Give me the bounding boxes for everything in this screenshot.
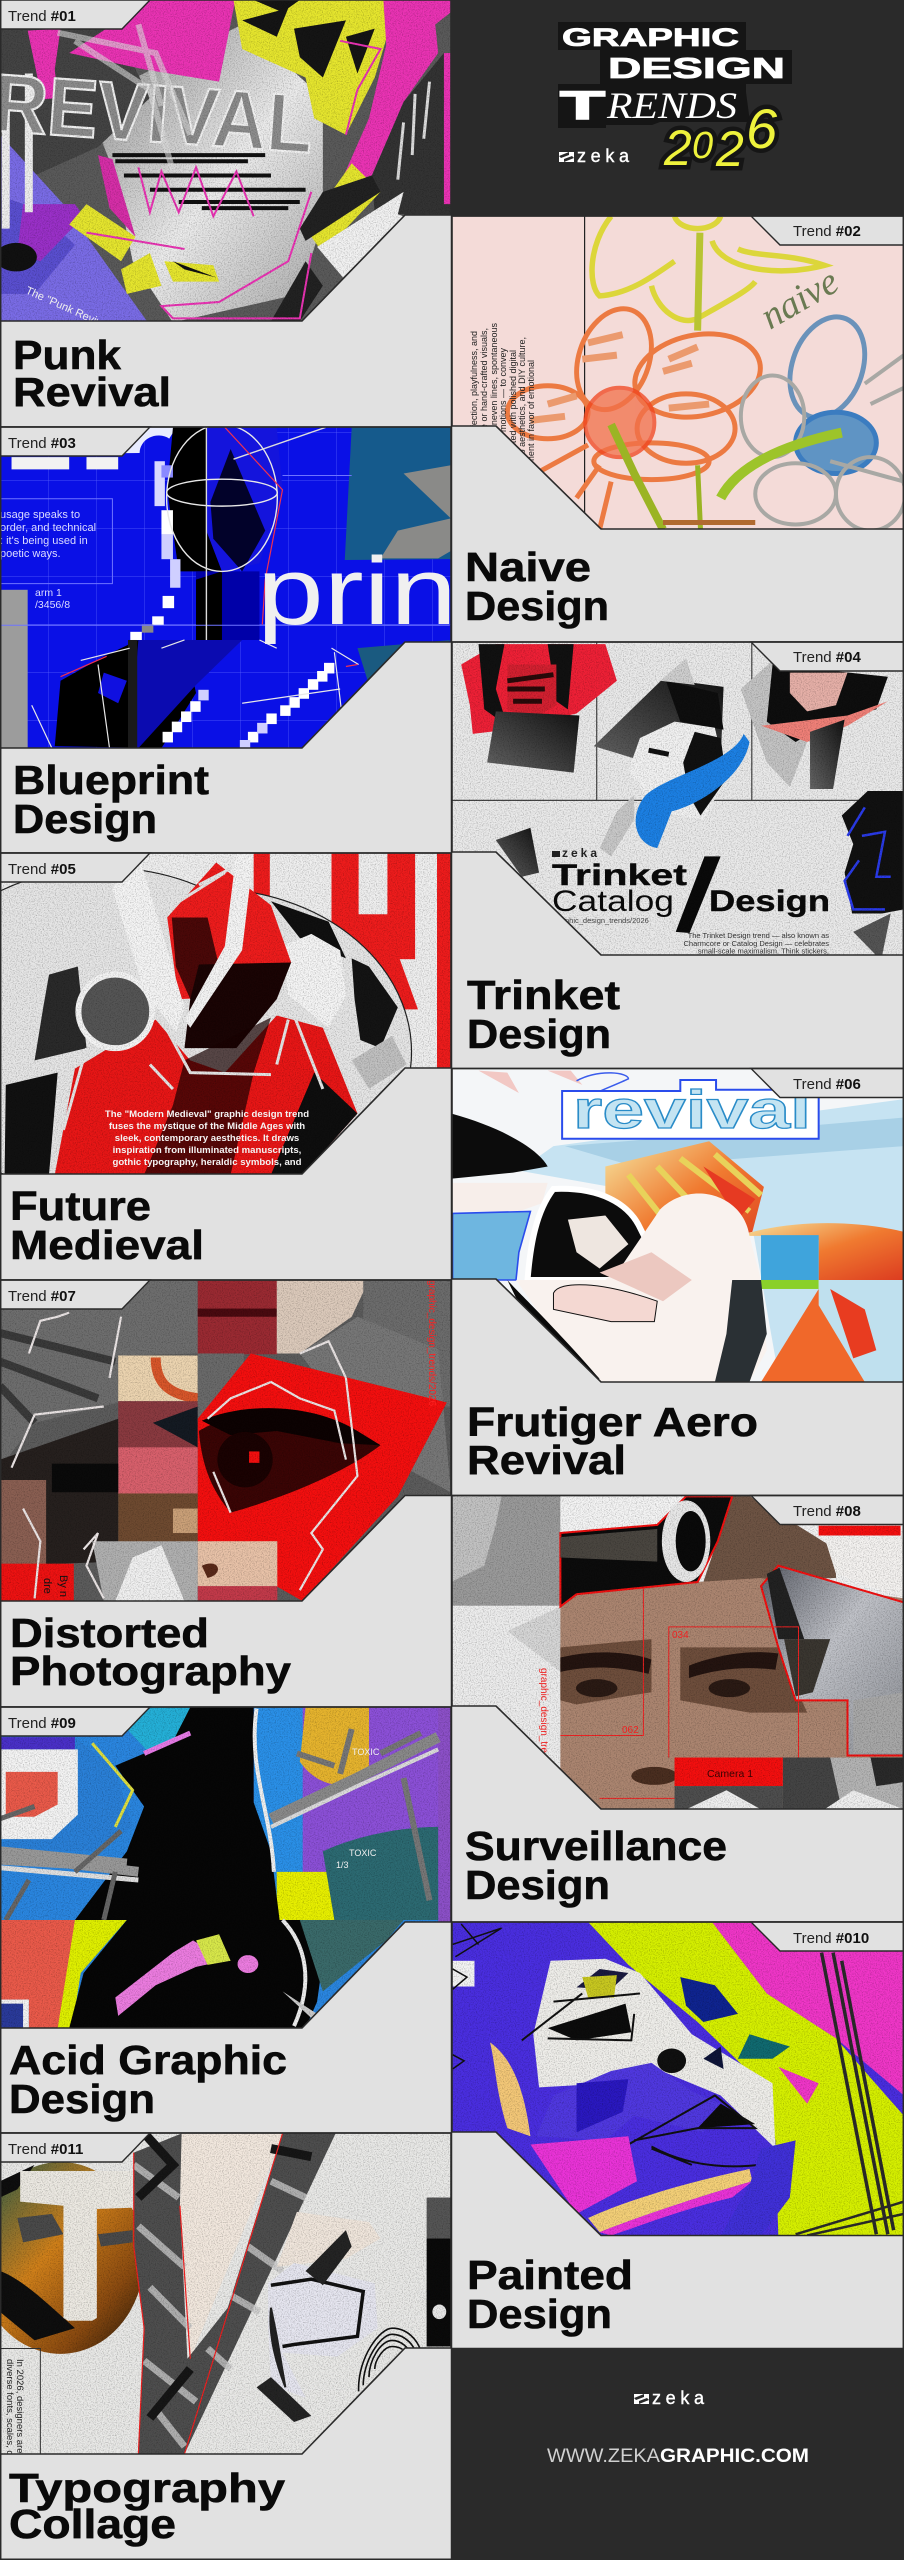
image outline xyxy=(452,1922,904,2236)
catalog body text xyxy=(684,932,829,954)
heading: blueprint design xyxy=(13,757,209,842)
artwork text: revival: REVIVAL xyxy=(0,58,316,171)
catalog heading xyxy=(552,859,830,918)
tab: trend 11: Trend #011 xyxy=(8,2141,83,2158)
body text: : it's being used in xyxy=(0,535,88,547)
tab: trend 07: Trend #07 xyxy=(8,1288,76,1305)
red box text xyxy=(44,1576,68,1596)
rotated body text: motions — to convey xyxy=(498,348,508,432)
box labels xyxy=(622,1630,689,1736)
tab: trend 03 xyxy=(0,427,150,456)
heading: acid graphic design: Design xyxy=(9,2076,155,2122)
heading: future medieval xyxy=(10,1183,204,1268)
big type: print: prin xyxy=(257,538,457,645)
tab: trend 02: Trend #02 xyxy=(793,223,861,240)
heading: future medieval: Future xyxy=(10,1183,151,1229)
panel: trend 02 naive design xyxy=(452,216,904,629)
image outline xyxy=(452,642,904,955)
heading: painted design xyxy=(467,2252,633,2337)
heading: acid graphic design: Acid Graphic xyxy=(9,2037,287,2083)
catalog heading: Trinket xyxy=(552,859,687,892)
tab: trend 06: Trend #06 xyxy=(793,1076,861,1093)
heading: distorted photography: Photography xyxy=(10,1648,291,1694)
website url xyxy=(547,2445,809,2467)
rotated body text: e or hand-crafted visuals, xyxy=(479,328,489,429)
artwork: punk collage xyxy=(0,0,452,334)
small label: /3456/8 xyxy=(35,599,70,611)
heading: naive design xyxy=(465,544,609,629)
footer panel xyxy=(452,2349,904,2560)
gothic text block xyxy=(105,1109,309,1168)
heading: typography collage xyxy=(9,2465,285,2547)
heading: trinket design: Trinket xyxy=(467,972,620,1018)
catalog heading: Catalog xyxy=(552,885,674,918)
image outline xyxy=(0,1707,451,2028)
box labels: 034 xyxy=(672,1630,689,1641)
image outline xyxy=(0,427,451,748)
panel: trend 01 punk revival xyxy=(0,0,452,415)
catalog body text: Charmcore or Catalog Design — celebrates xyxy=(684,939,829,948)
camera label: Camera 1 xyxy=(707,1768,753,1780)
heading: future medieval: Medieval xyxy=(10,1222,204,1268)
body text: usage speaks to xyxy=(0,509,80,521)
body text: order, and technical xyxy=(0,522,96,534)
gothic text block: fuses the mystique of the Middle Ages with xyxy=(109,1121,305,1132)
heading: typography collage: Collage xyxy=(9,2501,176,2547)
heading: naive design: Naive xyxy=(465,544,591,590)
image outline xyxy=(0,0,451,321)
image outline xyxy=(452,1068,904,1382)
panel: trend 11 typography collage xyxy=(0,2133,452,2547)
website url: WWW.ZEKA xyxy=(547,2445,660,2467)
heading: trinket design: Design xyxy=(467,1011,611,1057)
rotated body text: diverse fonts, scales, d xyxy=(4,2359,15,2456)
artwork labels: TOXIC xyxy=(352,1747,380,1757)
heading: trinket design xyxy=(467,972,620,1057)
title: 2026: 2 xyxy=(715,121,744,177)
panel: trend 09 acid graphic design xyxy=(0,1707,452,2122)
tab: trend 01: Trend #01 xyxy=(8,8,76,25)
heading: distorted photography: Distorted xyxy=(10,1610,209,1656)
panel: trend 04 trinket design xyxy=(451,642,904,1057)
catalog body text: The Trinket Design trend — also known as xyxy=(688,931,829,940)
heading: punk revival: Revival xyxy=(13,369,171,415)
small text: The "Punk Revival" xyxy=(24,285,115,334)
panel: trend 05 future medieval xyxy=(0,853,452,1268)
red box text: By n xyxy=(57,1575,69,1597)
tab: trend 07 xyxy=(0,1280,150,1309)
heading: typography collage: Typography xyxy=(9,2465,285,2511)
heading: acid graphic design xyxy=(9,2037,287,2122)
tab: trend 05 xyxy=(0,853,150,882)
panel: trend 07 distorted photography xyxy=(0,1280,452,1694)
rotated body text xyxy=(469,323,536,464)
tab: trend 11 xyxy=(0,2133,150,2162)
small label: arm 1 xyxy=(35,587,62,599)
heading: surveillance design: Design xyxy=(465,1862,610,1908)
gothic text block: The "Modern Medieval" graphic design trend xyxy=(105,1109,309,1120)
logo: zeka: zeka xyxy=(577,146,630,166)
header panel xyxy=(452,0,904,216)
title: Trends xyxy=(560,84,737,128)
rotated body text: s, uneven lines, spontaneous xyxy=(489,323,499,440)
heading: frutiger aero revival xyxy=(467,1399,758,1483)
artwork: crayon flowers xyxy=(452,216,904,531)
small label xyxy=(35,589,70,608)
heading: frutiger aero revival: Frutiger Aero xyxy=(467,1399,758,1445)
heading: blueprint design: Blueprint xyxy=(13,757,209,803)
image outline xyxy=(0,853,451,1174)
artwork: painted face xyxy=(451,1922,904,2236)
tab: trend 09 xyxy=(0,1707,150,1736)
tab: trend 08: Trend #08 xyxy=(793,1503,861,1520)
heading: distorted photography xyxy=(10,1610,291,1694)
rotated body text: ment in favor of emotional xyxy=(526,360,536,464)
gothic text block: inspiration from illuminated manuscripts, xyxy=(113,1145,302,1156)
tab: trend 08 xyxy=(751,1496,904,1524)
heading: painted design: Painted xyxy=(467,2252,633,2298)
rotated body text: eb aesthetics, and DIY culture, xyxy=(517,337,527,459)
artwork: trinket catalog xyxy=(451,642,904,956)
red box text: dre xyxy=(41,1578,53,1594)
artwork: blueprint figure xyxy=(0,424,457,753)
logo: zeka: zeka xyxy=(652,2388,705,2408)
artwork: frutiger aero xyxy=(451,1068,904,1382)
tab: trend 01 xyxy=(0,0,150,29)
catalog logo xyxy=(552,848,598,857)
panel: trend 08 surveillance design xyxy=(451,1495,904,1908)
title: Graphic: GRAPHIC xyxy=(562,24,739,52)
scribble overlay xyxy=(58,24,381,318)
tab: trend 10: Trend #010 xyxy=(793,1930,869,1947)
title: Design: DESIGN xyxy=(608,53,785,85)
heading: naive design: Design xyxy=(465,583,609,629)
artwork: typography collage xyxy=(0,2133,452,2456)
tab: trend 03: Trend #03 xyxy=(8,435,76,452)
catalog body text: small-scale maximalism. Think stickers, xyxy=(698,946,829,956)
image outline xyxy=(0,2133,451,2454)
image outline xyxy=(452,216,904,529)
image outline xyxy=(452,1496,904,1809)
heading: surveillance design xyxy=(465,1823,727,1908)
rotated body text: sted with polished digital xyxy=(508,350,518,448)
panel: trend 10 painted design xyxy=(451,1922,904,2337)
image outline xyxy=(0,1280,451,1601)
tab: trend 06 xyxy=(751,1068,904,1098)
logo type: revival: revival xyxy=(573,1080,811,1140)
gothic text block: gothic typography, heraldic symbols, and xyxy=(112,1157,302,1168)
heading: painted design: Design xyxy=(467,2291,612,2337)
heading: punk revival xyxy=(13,332,171,415)
title: 2026: 2 xyxy=(663,120,692,176)
catalog logo: zeka xyxy=(562,846,597,860)
title: 2026: 6 xyxy=(746,97,778,160)
handwritten word: naive: naive xyxy=(754,260,846,338)
tab: trend 02 xyxy=(751,216,904,245)
title: 2026: 0 xyxy=(692,125,713,167)
rotated body text: perfection, playfulness, and xyxy=(469,331,479,441)
artwork labels xyxy=(336,1747,380,1870)
heading: frutiger aero revival: Revival xyxy=(467,1437,626,1483)
tab: trend 04 xyxy=(751,642,904,671)
title backing shape xyxy=(558,22,792,128)
rotated red text: graphic_design_tre xyxy=(538,1668,549,1753)
tab: trend 10 xyxy=(751,1922,904,1951)
artwork labels: TOXIC xyxy=(349,1848,377,1858)
title: 2026 xyxy=(663,97,778,177)
heading: surveillance design: Surveillance xyxy=(465,1823,727,1869)
catalog hashtag: phic_design_trends/2026 xyxy=(565,916,649,925)
rotated body text: In 2026, designers are xyxy=(14,2359,25,2454)
panel: trend 03 blueprint design xyxy=(0,424,457,842)
title: Trends: RENDS xyxy=(606,86,737,127)
tab: trend 05: Trend #05 xyxy=(8,861,76,878)
artwork: medieval knight xyxy=(0,853,452,1175)
body text xyxy=(0,509,96,560)
artwork: distorted photo mosaic xyxy=(0,1280,452,1601)
box labels: 062 xyxy=(622,1725,639,1736)
rotated red text: graphic_design_trends/2026 xyxy=(426,1280,437,1407)
tab: trend 04: Trend #04 xyxy=(793,649,861,666)
catalog heading: Design xyxy=(709,885,830,918)
heading: blueprint design: Design xyxy=(13,796,157,842)
website url: GRAPHIC.COM xyxy=(660,2445,809,2467)
heading: punk revival: Punk xyxy=(13,332,121,378)
artwork: acid graphic xyxy=(0,1707,452,2028)
title: Trends: T xyxy=(560,84,605,128)
artwork: surveillance camera face xyxy=(451,1495,904,1809)
panel: trend 06 frutiger aero revival xyxy=(451,1068,904,1483)
tab: trend 09: Trend #09 xyxy=(8,1715,76,1732)
artwork labels: 1/3 xyxy=(336,1860,349,1870)
gothic text block: sleek, contemporary aesthetics. It draws xyxy=(115,1133,299,1144)
body text: poetic ways. xyxy=(0,548,61,560)
rotated body text xyxy=(4,2359,25,2456)
